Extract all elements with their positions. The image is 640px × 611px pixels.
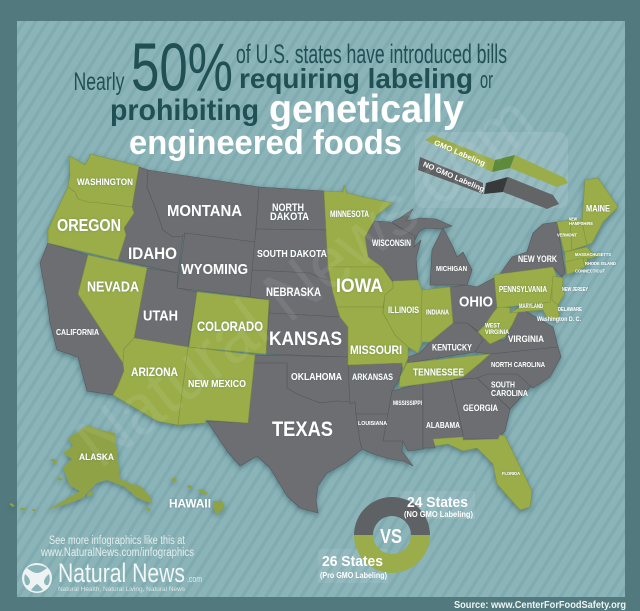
label: Mississippi: MISSISSIPPI bbox=[393, 401, 422, 407]
title: genetically: genetically bbox=[269, 88, 464, 131]
label: New Mexico: NEW MEXICO bbox=[188, 378, 246, 390]
state: Connecticut bbox=[565, 258, 585, 275]
label: Oklahoma: OKLAHOMA bbox=[291, 371, 342, 383]
label: Minnesota: MINNESOTA bbox=[330, 209, 369, 219]
state: Ohio bbox=[450, 278, 497, 332]
label: Ohio: OHIO bbox=[459, 294, 493, 310]
label: Wisconsin: WISCONSIN bbox=[372, 238, 411, 248]
promo line 1: See more infographics like this at bbox=[49, 535, 186, 547]
callout box: 26 states bbox=[318, 549, 388, 583]
state: New Mexico bbox=[178, 347, 255, 425]
label: Maine: MAINE bbox=[586, 204, 610, 214]
state: Nebraska bbox=[250, 270, 340, 317]
label: New Hampshire bbox=[569, 216, 593, 226]
map: Alaska bbox=[9, 425, 152, 512]
legend ribbon: NO GMO Labeling bbox=[418, 157, 559, 209]
state: North Carolina bbox=[451, 347, 561, 388]
state: Pennsylvania bbox=[494, 267, 557, 308]
map: contiguous states bbox=[40, 154, 618, 513]
state: Florida bbox=[433, 435, 532, 510]
state: California bbox=[40, 243, 124, 395]
label: South Dakota: SOUTH DAKOTA bbox=[257, 249, 327, 260]
title bbox=[74, 30, 507, 162]
state: Missouri bbox=[337, 307, 408, 370]
state: Alabama bbox=[423, 380, 463, 449]
label: Washington D.C.: Washington D. C. bbox=[537, 317, 581, 323]
legend ribbon: NO GMO Labeling: NO GMO Labeling bbox=[422, 160, 486, 194]
logo: Natural News bbox=[22, 558, 202, 593]
label: Michigan: MICHIGAN bbox=[436, 264, 467, 273]
state: West Virginia bbox=[478, 307, 520, 344]
state: Rhode Island bbox=[583, 258, 587, 267]
state: Tennessee bbox=[399, 354, 490, 387]
state: Illinois bbox=[383, 280, 423, 353]
state: Wyoming bbox=[177, 233, 255, 297]
state: New Jersey bbox=[552, 276, 565, 305]
promo text bbox=[40, 535, 194, 559]
VS label: VS bbox=[380, 526, 402, 548]
label: Delaware: DELAWARE bbox=[558, 307, 582, 313]
title: Nearly: Nearly bbox=[74, 68, 125, 96]
label: Illinois: ILLINOIS bbox=[388, 305, 419, 315]
label: Vermont: VERMONT bbox=[557, 232, 577, 238]
logo tagline: Natural Health, Natural Living, Natural News bbox=[58, 587, 185, 593]
state: New Hampshire bbox=[570, 220, 587, 250]
state: Georgia bbox=[451, 378, 510, 439]
state: Oregon bbox=[48, 187, 134, 260]
title: requiring labeling: requiring labeling bbox=[239, 63, 473, 94]
state: Utah bbox=[134, 268, 197, 347]
label: Idaho: IDAHO bbox=[128, 244, 177, 263]
Hawaii small islands bbox=[171, 478, 208, 496]
label: Colorado: COLORADO bbox=[197, 319, 263, 334]
label: New Hampshire: NEW bbox=[569, 216, 578, 222]
label: Connecticut: CONNECTICUT bbox=[575, 268, 605, 274]
label: North Dakota: NORTH bbox=[272, 202, 304, 214]
Alaska islands bbox=[9, 458, 151, 512]
title: or: or bbox=[480, 67, 493, 94]
state: Montana bbox=[147, 170, 259, 242]
state: Texas bbox=[207, 363, 362, 513]
map: Hawaii bbox=[171, 478, 225, 515]
label: New Hampshire: HAMPSHIRE bbox=[569, 221, 593, 226]
state: Virginia bbox=[475, 308, 558, 354]
24 States text: 24 States bbox=[407, 495, 468, 511]
title: of U.S. states: of U.S. states have introduced bills bbox=[236, 39, 507, 69]
logo .com: .com bbox=[187, 574, 202, 584]
label: Missouri: MISSOURI bbox=[350, 343, 402, 357]
state: New York bbox=[500, 222, 565, 277]
state: Arizona bbox=[113, 338, 188, 425]
state: Colorado bbox=[189, 292, 269, 354]
state: Nevada bbox=[78, 255, 147, 363]
label: Oregon: OREGON bbox=[57, 215, 121, 235]
watermark: Natural News.com bbox=[61, 79, 550, 483]
26 States text: 26 States bbox=[322, 554, 383, 570]
state: Idaho bbox=[118, 167, 183, 273]
label: Utah: UTAH bbox=[143, 308, 178, 324]
state: Michigan upper bbox=[392, 209, 452, 240]
state: Massachusetts bbox=[565, 247, 602, 262]
label: Rhode Island: RHODE ISLAND bbox=[585, 261, 617, 266]
label: Arkansas: ARKANSAS bbox=[352, 372, 393, 382]
label: Alabama: ALABAMA bbox=[426, 420, 460, 430]
title: engineered foods: engineered foods bbox=[129, 124, 402, 162]
state: Maine bbox=[582, 178, 618, 245]
state: South Carolina bbox=[477, 374, 533, 409]
label: Indiana: INDIANA bbox=[426, 308, 449, 316]
logo wordmark: Natural News bbox=[58, 558, 185, 588]
label: Nebraska: NEBRASKA bbox=[266, 285, 321, 299]
label: Kansas: KANSAS bbox=[269, 329, 342, 350]
label: Pennsylvania: PENNSYLVANIA bbox=[499, 285, 547, 294]
label: Nevada: NEVADA bbox=[87, 278, 139, 296]
label: West Virginia: WEST bbox=[485, 322, 500, 330]
label: South Carolina bbox=[491, 380, 528, 398]
label: Alaska: ALASKA bbox=[79, 452, 114, 463]
state: Louisiana bbox=[356, 414, 413, 466]
label: North Dakota: DAKOTA bbox=[270, 211, 309, 223]
state: Hawaii big island bbox=[213, 501, 225, 515]
label: South Carolina: SOUTH bbox=[491, 380, 515, 390]
label: Georgia: GEORGIA bbox=[463, 403, 498, 414]
state: Iowa bbox=[328, 267, 393, 307]
label: North Dakota bbox=[270, 202, 309, 223]
donut: no GMO half bbox=[354, 497, 430, 535]
label: California: CALIFORNIA bbox=[56, 328, 99, 337]
legend background bbox=[415, 132, 568, 208]
label: Florida: FLORIDA bbox=[502, 471, 521, 476]
label: Virginia: VIRGINIA bbox=[508, 334, 544, 345]
label: Louisiana: LOUISIANA bbox=[358, 421, 387, 427]
Pro GMO labeling text: (Pro GMO Labeling) bbox=[320, 570, 387, 580]
state: Alaska bbox=[47, 425, 152, 510]
donut: pro GMO half bbox=[354, 535, 430, 573]
title: 50%: 50% bbox=[131, 30, 233, 106]
label: New York: NEW YORK bbox=[518, 254, 557, 265]
state: Indiana bbox=[421, 287, 453, 342]
legend ribbon: GMO Labeling: GMO Labeling bbox=[433, 138, 487, 168]
state: Kentucky bbox=[407, 323, 483, 363]
promo line 2: www.NaturalNews.com/infographics bbox=[40, 547, 194, 559]
label: Wyoming: WYOMING bbox=[181, 261, 248, 278]
state: Michigan lower bbox=[430, 228, 472, 285]
icon: globe bbox=[22, 563, 52, 593]
state: Minnesota bbox=[324, 185, 393, 267]
label: South Carolina: CAROLINA bbox=[491, 389, 528, 398]
legend panel bbox=[415, 132, 568, 209]
title: prohibiting: prohibiting bbox=[110, 94, 259, 127]
label: West Virginia bbox=[485, 322, 509, 336]
state: Maryland and Delaware bbox=[510, 287, 559, 320]
label: Montana: MONTANA bbox=[167, 203, 242, 220]
label: Iowa: IOWA bbox=[336, 276, 383, 297]
state: South Dakota bbox=[252, 229, 333, 281]
state: Arkansas bbox=[348, 363, 403, 414]
label: Massachusetts: MASSACHUSETTS bbox=[575, 252, 611, 257]
state: Oklahoma bbox=[254, 355, 350, 404]
state: Wisconsin bbox=[365, 221, 421, 281]
state: Vermont bbox=[557, 220, 572, 252]
label: Hawaii: HAWAII bbox=[169, 496, 211, 510]
label: West Virginia: VIRGINIA bbox=[485, 329, 509, 336]
label: Maryland: MARYLAND bbox=[519, 304, 543, 310]
label: North Carolina: NORTH CAROLINA bbox=[491, 360, 545, 369]
label: Tennessee: TENNESSEE bbox=[413, 366, 464, 378]
state: Washington bbox=[68, 154, 139, 207]
state: Kansas bbox=[266, 313, 348, 357]
state: North Dakota bbox=[256, 187, 326, 230]
callout box: 24 states bbox=[400, 491, 475, 519]
comparison donut chart bbox=[318, 491, 475, 583]
label: Arizona: ARIZONA bbox=[131, 365, 178, 379]
label: Kentucky: KENTUCKY bbox=[432, 342, 472, 352]
label: New Jersey: NEW JERSEY bbox=[562, 287, 588, 293]
label: Washington: WASHINGTON bbox=[77, 177, 133, 188]
state labels bbox=[56, 177, 617, 510]
No GMO labeling text: (NO GMO Labeling) bbox=[404, 509, 473, 519]
label: Texas: TEXAS bbox=[272, 418, 333, 441]
state: Mississippi bbox=[383, 383, 423, 451]
legend ribbon: GMO Labeling bbox=[425, 135, 568, 187]
